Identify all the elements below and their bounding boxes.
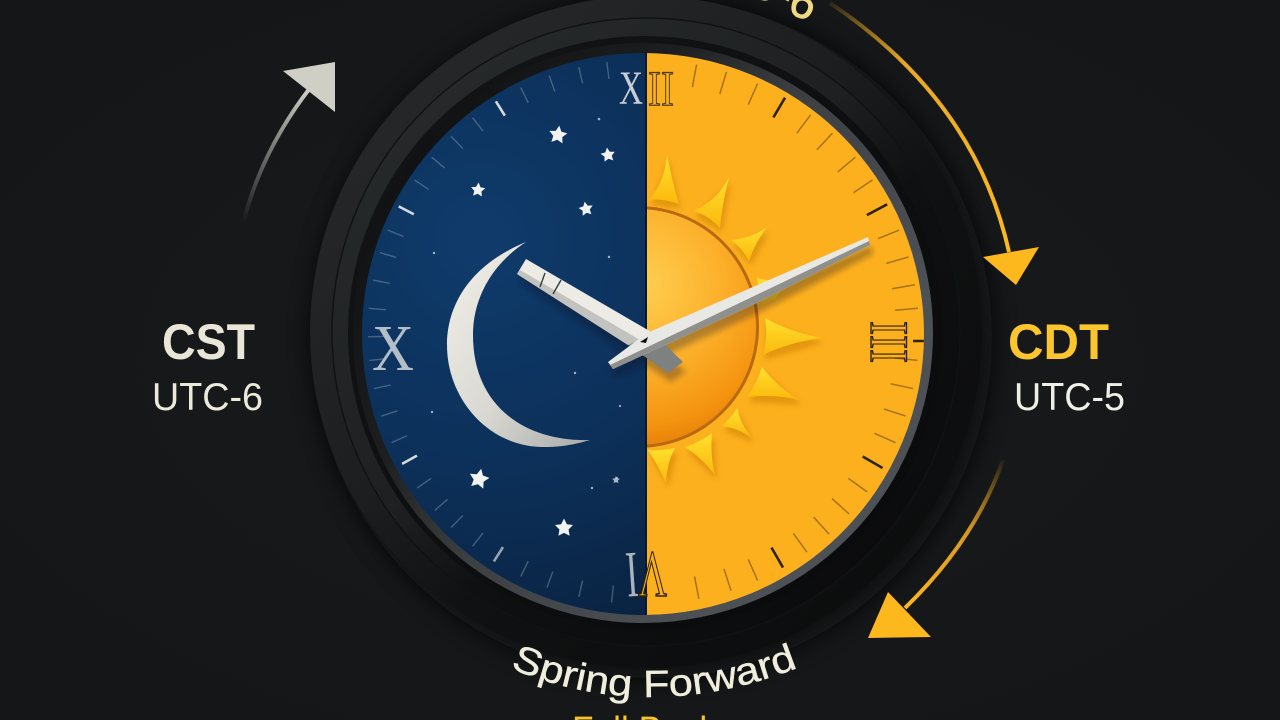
hour hand bbox=[517, 259, 683, 373]
major ticks: day side bbox=[772, 98, 924, 568]
panel: day half bbox=[647, 53, 924, 615]
left arrow: CST bbox=[243, 62, 335, 223]
bottom arrow: fall back bbox=[868, 460, 1003, 638]
hand shadows bbox=[520, 246, 873, 382]
star 5 bbox=[470, 468, 490, 489]
minute ticks: day side bbox=[692, 65, 918, 599]
divider shadow bbox=[645, 40, 647, 630]
numeral: VI bottom, day part: V bbox=[638, 538, 667, 611]
numeral: III at right: III bbox=[859, 321, 919, 363]
label: UTC-5: UTC-5 bbox=[1014, 376, 1125, 419]
small star dots bbox=[431, 118, 621, 489]
sun rays bbox=[648, 155, 822, 483]
icon: sun bbox=[647, 156, 821, 485]
star 4 bbox=[578, 202, 592, 216]
sun rays shadow bbox=[650, 160, 824, 488]
panel: night half bbox=[362, 53, 647, 615]
label: CDT: CDT bbox=[1008, 314, 1109, 370]
numeral: VI bottom, night part: I bbox=[623, 538, 640, 611]
right arrow: spring forward bbox=[830, 3, 1039, 285]
curved label: Spring Forward: Spring Forward bbox=[514, 642, 796, 704]
numeral: X at left: X bbox=[372, 312, 414, 385]
numeral: XII top, day part: II bbox=[648, 60, 674, 116]
stars bbox=[467, 124, 620, 536]
icon: crescent moon bbox=[447, 242, 590, 447]
star 7 bbox=[612, 476, 620, 483]
label: UTC-6: UTC-6 bbox=[152, 376, 263, 419]
star 2 bbox=[600, 148, 615, 162]
infographic: daylight saving clock bbox=[154, 0, 1124, 720]
numeral: XII top, night part: X bbox=[619, 62, 643, 115]
clock face bbox=[362, 53, 924, 615]
sun disc bbox=[647, 206, 759, 448]
major ticks: night side bbox=[399, 101, 505, 561]
label: CST: CST bbox=[162, 314, 255, 370]
minute ticks: night side bbox=[368, 62, 613, 603]
minute hand bbox=[608, 237, 870, 369]
star 1 bbox=[550, 126, 568, 144]
star 3 bbox=[471, 182, 486, 196]
star 6 bbox=[555, 518, 573, 536]
clock bezel bbox=[310, 0, 992, 678]
